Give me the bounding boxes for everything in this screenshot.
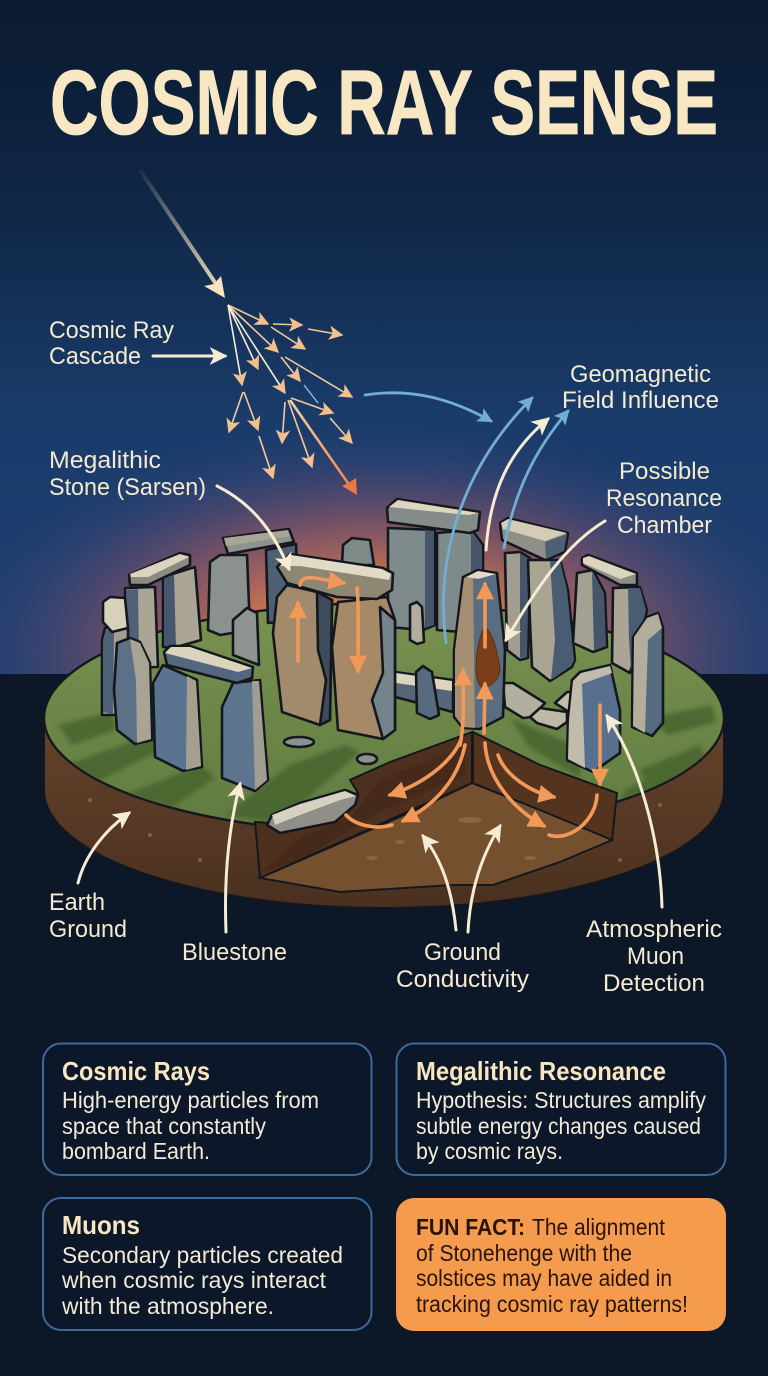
labels: Geomagnetic [570, 361, 711, 388]
panel: cosmic rays: space that constantly [62, 1113, 266, 1139]
energy arrows rising from ground [484, 684, 485, 733]
panel: cosmic rays: Cosmic Rays [62, 1056, 210, 1086]
panel: fun fact: FUN FACT: [416, 1214, 525, 1240]
sarsen trilithon with energy arrows [273, 554, 395, 739]
labels [49, 317, 722, 997]
blue stone energy arrow down [598, 705, 602, 784]
pebbles [284, 737, 377, 764]
panel: megalithic resonance: by cosmic rays. [416, 1138, 563, 1164]
cut wedge left wall [255, 732, 472, 878]
earth side wall [44, 718, 724, 908]
ground disc [44, 603, 724, 908]
energy arrow across lintel [300, 578, 344, 585]
far left stone [102, 597, 128, 715]
energy arrow up through stone [483, 584, 487, 647]
cut wedge floor [260, 783, 612, 892]
blue stone, front right [567, 665, 620, 772]
central resonance stone with chamber [454, 570, 505, 745]
panel: cosmic rays [43, 1044, 372, 1175]
panel: fun fact: The alignment [532, 1214, 665, 1240]
labels: Ground [49, 916, 127, 943]
panel: fun fact: solstices may have aided in [416, 1265, 672, 1291]
panel: muons: Secondary particles created [62, 1242, 343, 1268]
panel: fun fact: tracking cosmic ray patterns! [416, 1291, 688, 1317]
labels: Conductivity [396, 966, 530, 993]
panel: fun fact: of Stonehenge with the [416, 1240, 632, 1266]
panel: muons: with the atmosphere. [61, 1293, 274, 1319]
back centre trilithon [387, 499, 483, 634]
panel: megalithic resonance [396, 1044, 726, 1175]
labels: Stone (Sarsen) [49, 474, 206, 501]
panel: cosmic rays: High-energy particles from [62, 1087, 319, 1113]
labels: Field Influence [562, 387, 719, 414]
fallen stone [267, 790, 358, 833]
labels: Detection [603, 970, 705, 997]
labels: Megalithic [49, 447, 161, 474]
blue stone, front left [114, 638, 152, 744]
labels: Muon [627, 943, 684, 970]
panel: muons: when cosmic rays interact [61, 1267, 326, 1293]
right back trilithon [500, 518, 575, 681]
panel: megalithic resonance: Hypothesis: Structures amplify [416, 1087, 706, 1113]
panel: fun fact [396, 1198, 726, 1331]
labels: Possible [619, 458, 710, 485]
panel: megalithic resonance: Megalithic Resonance [416, 1056, 666, 1086]
panel: muons [43, 1198, 372, 1330]
labels: Chamber [617, 512, 712, 539]
labels: Cascade [49, 343, 141, 370]
geomagnetic field arrows [365, 393, 568, 643]
labels: Atmospheric [586, 916, 722, 943]
grass shadow stripes [58, 705, 716, 822]
panel: megalithic resonance: subtle energy changes caused [416, 1113, 701, 1139]
labels: Earth [49, 889, 105, 916]
front left bluestone trilithon [153, 646, 268, 791]
soil specks [88, 798, 662, 862]
darker soil band on left wall [262, 745, 465, 872]
labels: Bluestone [182, 939, 287, 966]
left trilithon [125, 553, 201, 668]
energy arrow down [357, 588, 358, 671]
small middle stone [233, 608, 259, 665]
resonance chamber cavity [476, 627, 500, 687]
labels: Ground [424, 939, 501, 966]
rocks right of cut [503, 683, 571, 729]
label arrows [78, 356, 662, 932]
far right stone [632, 613, 663, 736]
panel: muons: Muons [62, 1210, 140, 1240]
cosmic ray cascade arrows [140, 170, 357, 495]
cut wedge right wall [473, 732, 617, 840]
energy arrow up [296, 603, 300, 661]
right outer trilithon [573, 555, 647, 673]
back left trilithon [208, 529, 374, 635]
labels: Resonance [606, 485, 722, 512]
grass top surface [44, 603, 724, 833]
underground energy arrows [346, 740, 597, 836]
labels: Cosmic Ray [49, 317, 175, 344]
small back stone [410, 602, 424, 644]
low central lintel and stone [395, 666, 453, 719]
panel: cosmic rays: bombard Earth. [62, 1138, 210, 1164]
